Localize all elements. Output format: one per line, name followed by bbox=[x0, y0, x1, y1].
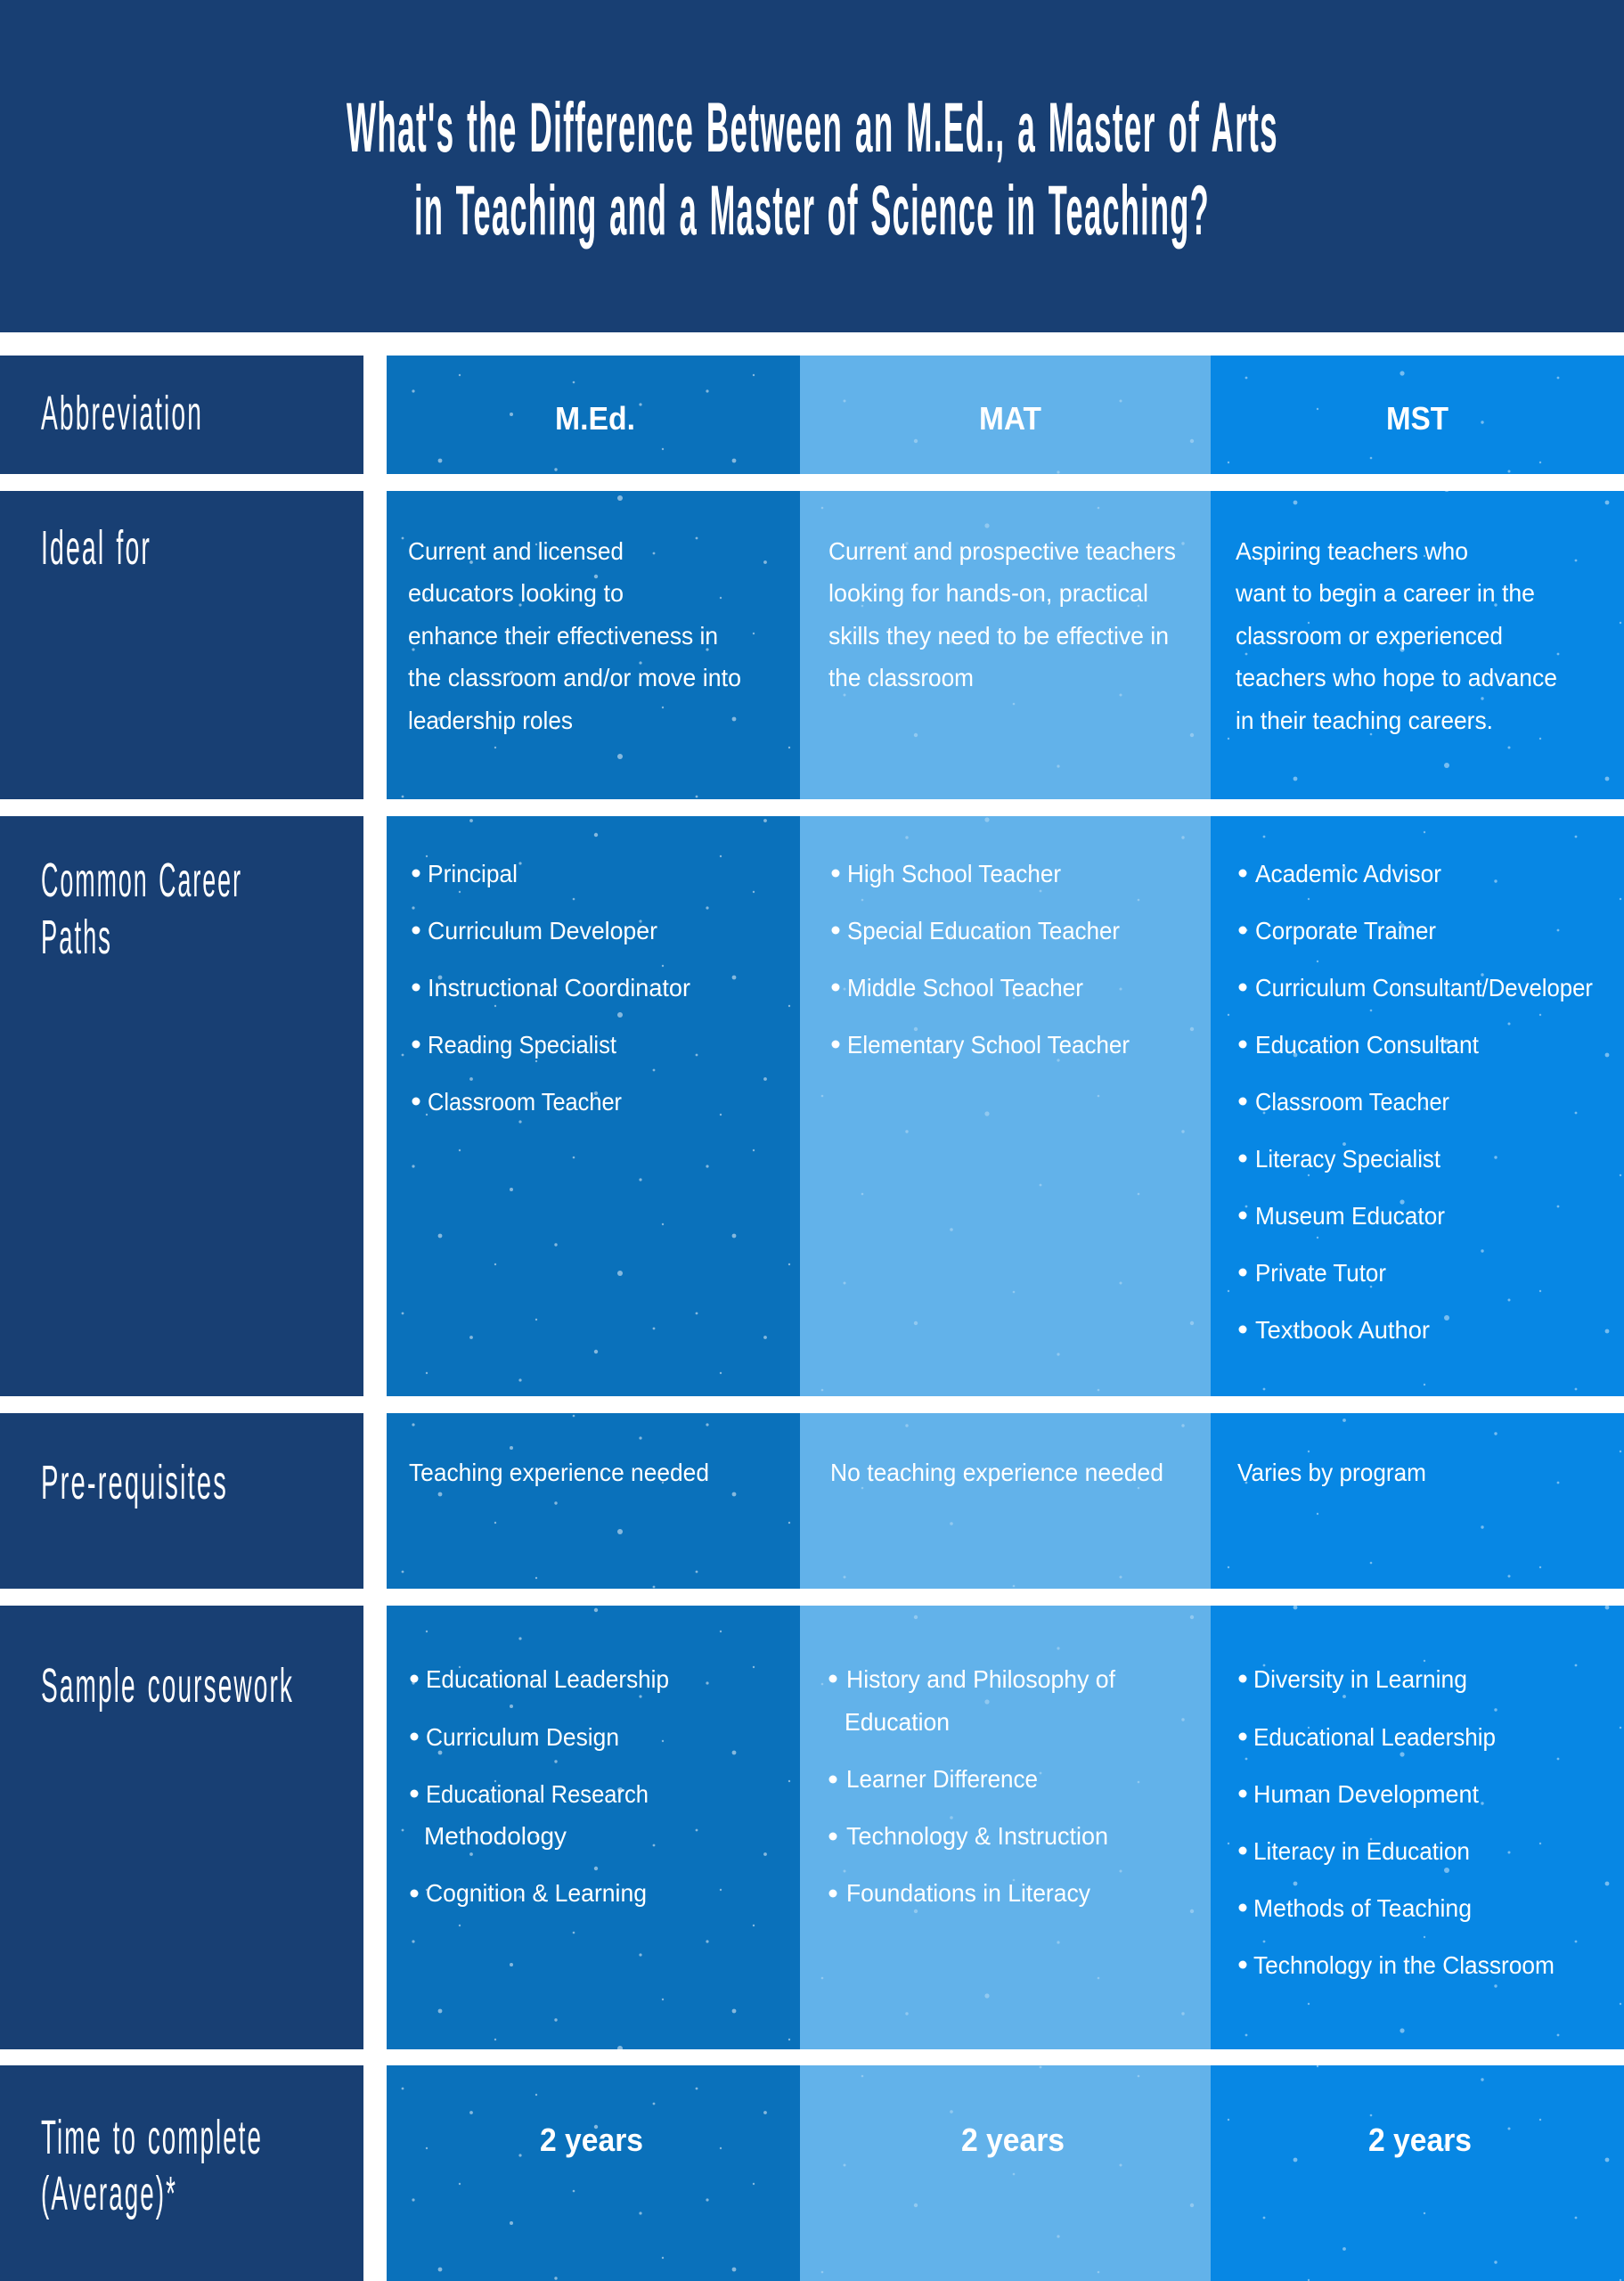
cell: M.Ed. abbreviation: M.Ed. bbox=[555, 400, 635, 437]
cell: MAT career paths bbox=[800, 816, 1211, 1396]
cell: MST ideal for: teachers who hope to advance bbox=[1236, 664, 1557, 691]
row: abbreviation bbox=[0, 356, 1624, 474]
cell: MAT time bbox=[800, 2065, 1211, 2281]
cell: MST ideal for: in their teaching careers. bbox=[1236, 707, 1493, 734]
cell: MST career paths: Curriculum Consultant/Developer bbox=[1255, 974, 1593, 1002]
cell: MST coursework: Diversity in Learning bbox=[1253, 1665, 1467, 1693]
cell: M.Ed. abbreviation bbox=[387, 356, 800, 474]
cell: M.Ed. coursework: Cognition & Learning bbox=[426, 1879, 647, 1907]
cell: M.Ed. ideal for: the classroom and/or move into bbox=[408, 664, 741, 691]
cell: MAT career paths: Special Education Teacher bbox=[847, 917, 1120, 944]
cell: MAT coursework: Technology & Instruction bbox=[846, 1822, 1108, 1850]
label: common career paths bbox=[0, 816, 363, 1396]
cell: MAT time: 2 years bbox=[961, 2122, 1065, 2158]
cell: MST time: 2 years bbox=[1368, 2122, 1472, 2158]
cell: MST career paths: Education Consultant bbox=[1255, 1031, 1479, 1059]
cell: MAT ideal for: looking for hands-on, practical bbox=[828, 579, 1148, 607]
cell: MAT career paths: Elementary School Teacher bbox=[847, 1031, 1130, 1059]
cell: MST career paths: Classroom Teacher bbox=[1255, 1088, 1449, 1116]
label: common career paths: Paths bbox=[41, 911, 112, 964]
cell: MAT ideal for: skills they need to be effective in bbox=[828, 622, 1169, 650]
cell: MST coursework: Methods of Teaching bbox=[1253, 1894, 1472, 1922]
cell: MST pre-requisites: Varies by program bbox=[1237, 1459, 1426, 1486]
cell: MST career paths: Textbook Author bbox=[1255, 1316, 1430, 1344]
cell: M.Ed. career paths bbox=[387, 816, 800, 1396]
label: abbreviation: Abbreviation bbox=[41, 387, 203, 440]
cell: MST ideal for: Aspiring teachers who bbox=[1236, 537, 1468, 565]
cell: M.Ed. ideal for: educators looking to bbox=[408, 579, 624, 607]
cell: MST coursework: Human Development bbox=[1253, 1780, 1479, 1808]
cell: MST ideal for: want to begin a career in the bbox=[1235, 579, 1535, 607]
cell: M.Ed. time bbox=[387, 2065, 800, 2281]
cell: MST career paths bbox=[1211, 816, 1624, 1396]
cell: MAT pre-requisites: No teaching experience needed bbox=[830, 1459, 1163, 1486]
cell: M.Ed. ideal for: Current and licensed bbox=[408, 537, 624, 565]
cell: M.Ed. ideal for: enhance their effectiveness in bbox=[408, 622, 718, 650]
cell: MST career paths: Corporate Trainer bbox=[1255, 917, 1436, 944]
cell: MST ideal for: classroom or experienced bbox=[1236, 622, 1503, 650]
label: time to complete: Time to complete bbox=[41, 2111, 263, 2164]
header banner bbox=[0, 0, 1624, 332]
label: pre-requisites: Pre-requisites bbox=[41, 1456, 228, 1509]
cell: M.Ed. career paths: Reading Specialist bbox=[428, 1031, 616, 1059]
title bbox=[347, 87, 1278, 249]
cell: MAT ideal for: Current and prospective teachers bbox=[828, 537, 1176, 565]
cell: MST career paths: Academic Advisor bbox=[1255, 860, 1441, 887]
cell: M.Ed. pre-requisites bbox=[387, 1413, 800, 1589]
label: common career paths: Common Career bbox=[41, 854, 242, 907]
cell: MST coursework bbox=[1211, 1606, 1624, 2049]
cell: M.Ed. pre-requisites: Teaching experience needed bbox=[409, 1459, 709, 1486]
cell: MST coursework: Technology in the Classroom bbox=[1253, 1951, 1555, 1979]
cell: MAT abbreviation: MAT bbox=[979, 400, 1041, 437]
row: time to complete bbox=[0, 2065, 1624, 2281]
cell: MST career paths: Museum Educator bbox=[1255, 1202, 1445, 1230]
cell: M.Ed. career paths: Instructional Coordinator bbox=[428, 974, 690, 1002]
cell: MST ideal for bbox=[1211, 491, 1624, 799]
cell: MAT coursework: History and Philosophy of bbox=[846, 1665, 1115, 1693]
row: ideal for bbox=[0, 491, 1624, 799]
cell: M.Ed. ideal for: leadership roles bbox=[408, 707, 573, 734]
label: sample coursework bbox=[0, 1606, 363, 2049]
cell: MAT coursework: Learner Difference bbox=[846, 1765, 1038, 1793]
cell: MAT coursework: Foundations in Literacy bbox=[846, 1879, 1090, 1907]
label: time to complete bbox=[0, 2065, 363, 2281]
cell: M.Ed. career paths: Principal bbox=[428, 860, 518, 887]
label: sample coursework: Sample coursework bbox=[41, 1659, 294, 1713]
cell: M.Ed. career paths: Classroom Teacher bbox=[428, 1088, 622, 1116]
cell: MAT career paths: Middle School Teacher bbox=[847, 974, 1083, 1002]
cell: MST abbreviation bbox=[1211, 356, 1624, 474]
cell: M.Ed. career paths: Curriculum Developer bbox=[428, 917, 657, 944]
label: pre-requisites bbox=[0, 1413, 363, 1589]
cell: M.Ed. coursework: Educational Research bbox=[426, 1780, 649, 1808]
cell: MAT coursework: Education bbox=[845, 1708, 950, 1736]
cell: MAT career paths: High School Teacher bbox=[847, 860, 1061, 887]
cell: MST abbreviation: MST bbox=[1386, 400, 1449, 437]
cell: MAT pre-requisites bbox=[800, 1413, 1211, 1589]
cell: M.Ed. coursework: Curriculum Design bbox=[426, 1723, 619, 1751]
cell: MAT coursework bbox=[800, 1606, 1211, 2049]
label: abbreviation bbox=[0, 356, 363, 474]
cell: M.Ed. ideal for bbox=[387, 491, 800, 799]
cell: MAT ideal for: the classroom bbox=[828, 664, 974, 691]
cell: MST coursework: Educational Leadership bbox=[1253, 1723, 1496, 1751]
cell: MAT abbreviation bbox=[800, 356, 1211, 474]
row: sample coursework bbox=[0, 1606, 1624, 2049]
cell: MST coursework: Literacy in Education bbox=[1253, 1837, 1470, 1865]
cell: MST career paths: Private Tutor bbox=[1255, 1259, 1386, 1287]
row: pre-requisites bbox=[0, 1413, 1624, 1589]
cell: MST career paths: Literacy Specialist bbox=[1255, 1145, 1440, 1173]
label: ideal for: Ideal for bbox=[41, 521, 151, 575]
cell: M.Ed. time: 2 years bbox=[540, 2122, 643, 2158]
cell: MST time bbox=[1211, 2065, 1624, 2281]
cell: MAT ideal for bbox=[800, 491, 1211, 799]
cell: MST pre-requisites bbox=[1211, 1413, 1624, 1589]
cell: M.Ed. coursework: Methodology bbox=[424, 1822, 567, 1850]
label: time to complete: (Average)* bbox=[41, 2167, 177, 2220]
label: ideal for bbox=[0, 491, 363, 799]
cell: M.Ed. coursework bbox=[387, 1606, 800, 2049]
cell: M.Ed. coursework: Educational Leadership bbox=[426, 1665, 669, 1693]
row: common career paths bbox=[0, 816, 1624, 1396]
